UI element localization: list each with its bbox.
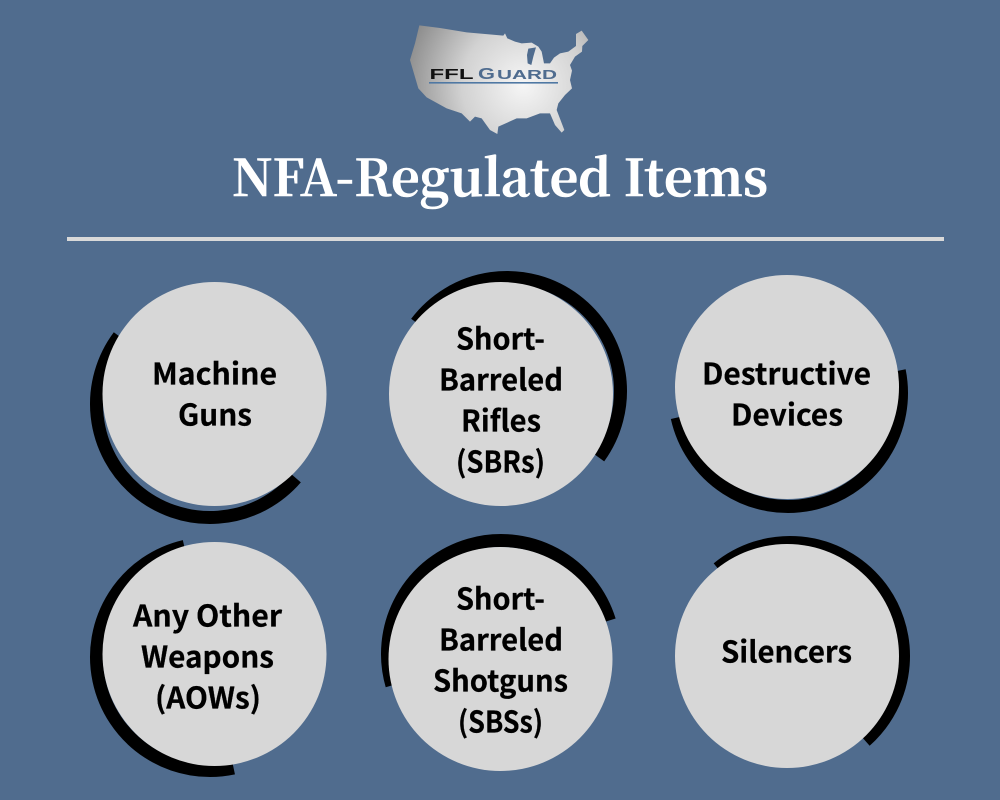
item: Short-Barreled Shotguns: Short- — [456, 576, 545, 618]
item: Any Other Weapons — [75, 522, 345, 792]
logo wordmark: UARD — [497, 68, 557, 82]
title: NFA-Regulated Items — [232, 139, 768, 211]
item: Machine Guns: Guns — [178, 392, 252, 434]
logo wordmark — [429, 66, 558, 84]
logo: FFL Guard US map — [410, 25, 588, 134]
icon: US map silhouette — [410, 25, 588, 134]
logo wordmark: FFL — [430, 66, 474, 83]
item: Silencers — [630, 496, 950, 800]
item: Short-Barreled Shotguns: Shotguns — [433, 658, 568, 700]
item: Destructive Devices: Destructive — [702, 352, 871, 394]
item: Short-Barreled Rifles: Short- — [456, 316, 545, 358]
logo wordmark: G — [478, 66, 495, 83]
item: Short-Barreled Rifles: (SBRs) — [456, 440, 545, 482]
item: Short-Barreled Shotguns — [360, 513, 642, 795]
item: Machine Guns: Machine — [152, 352, 277, 394]
item: Short-Barreled Rifles: Barreled — [439, 358, 563, 400]
item: Silencers: Silencers — [721, 630, 852, 672]
item: Any Other Weapons: (AOWs) — [155, 676, 261, 718]
divider line — [67, 237, 944, 241]
item: Short-Barreled Rifles: Rifles — [461, 398, 541, 440]
item: Machine Guns — [50, 244, 370, 564]
item: Destructive Devices: Devices — [731, 392, 843, 434]
item: Destructive Devices — [654, 259, 922, 527]
item: Short-Barreled Shotguns: (SBSs) — [458, 700, 543, 742]
item: Short-Barreled Shotguns: Barreled — [439, 618, 563, 660]
item: Short-Barreled Rifles — [348, 232, 666, 550]
item: Any Other Weapons: Weapons — [141, 634, 274, 676]
item: Any Other Weapons: Any Other — [132, 594, 282, 636]
